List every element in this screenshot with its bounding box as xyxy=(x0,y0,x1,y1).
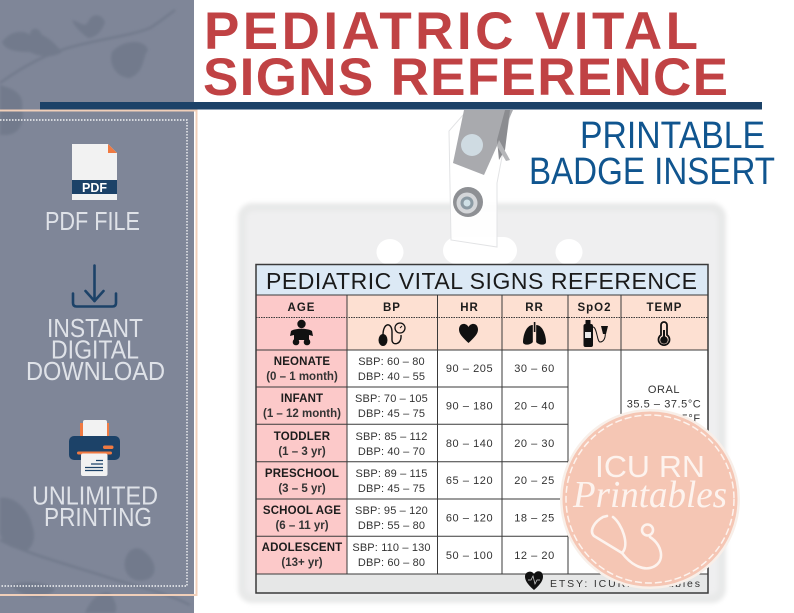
age column labels: SCHOOL AGE xyxy=(263,505,341,517)
age column labels: NEONATE xyxy=(274,356,330,368)
age column labels: (1 – 3 yr) xyxy=(278,446,326,458)
icon: oxygen tank xyxy=(584,320,608,347)
respiratory rate values xyxy=(514,363,555,562)
footer credit xyxy=(525,571,700,590)
blood pressure values xyxy=(352,356,431,569)
footer credit: ETSY: ICURNPrintables xyxy=(550,578,700,590)
subtitle: PRINTABLE xyxy=(580,115,765,157)
label: PDF file: PDF FILE xyxy=(45,206,140,236)
label: instant digital download: DOWNLOAD xyxy=(26,356,165,386)
blood pressure values: SBP: 60 – 80 xyxy=(358,356,425,368)
label: unlimited printing xyxy=(32,480,158,532)
badge: ICU RN Printables logo xyxy=(560,409,740,589)
label: instant digital download: INSTANT xyxy=(47,313,143,343)
heart rate values xyxy=(446,363,493,562)
age column labels: (13+ yr) xyxy=(281,557,323,569)
label: instant digital download: DIGITAL xyxy=(51,334,139,364)
respiratory rate values: 20 – 30 xyxy=(514,438,555,450)
blood pressure values: DBP: 55 – 80 xyxy=(358,520,425,532)
column headers xyxy=(288,302,682,314)
temperature values: 95.9 – 99.5°F xyxy=(627,413,701,425)
icon: blood pressure cuff xyxy=(378,323,405,346)
badge insert reference table xyxy=(256,264,708,593)
heart rate values: 60 – 120 xyxy=(446,512,493,524)
temperature values xyxy=(627,384,701,425)
age column labels: (1 – 12 month) xyxy=(263,408,341,420)
age column labels: ADOLESCENT xyxy=(262,542,342,554)
peach border lines xyxy=(0,110,196,595)
table title: PEDIATRIC VITAL SIGNS REFERENCE xyxy=(266,268,697,294)
blood pressure values: SBP: 85 – 112 xyxy=(355,431,428,443)
decorative leaf shadows xyxy=(0,10,190,613)
label: instant digital download xyxy=(26,313,165,386)
icon: download xyxy=(73,266,116,306)
column headers: HR xyxy=(460,302,479,314)
respiratory rate values: 20 – 25 xyxy=(514,475,555,487)
heading: main title: PEDIATRIC VITAL xyxy=(204,2,698,61)
age column labels: (0 – 1 month) xyxy=(266,371,338,383)
heading: main title xyxy=(203,2,728,107)
label: unlimited printing: UNLIMITED xyxy=(32,480,158,510)
blood pressure values: DBP: 60 – 80 xyxy=(358,557,425,569)
heart rate values: 90 – 205 xyxy=(446,363,493,375)
blood pressure values: SBP: 95 – 120 xyxy=(355,505,428,517)
column headers: SpO2 xyxy=(577,302,612,314)
metal clip xyxy=(453,110,513,217)
age column labels: TODDLER xyxy=(274,431,331,443)
temperature values: 35.5 – 37.5°C xyxy=(627,398,701,410)
blood pressure values: DBP: 45 – 75 xyxy=(358,483,425,495)
column headers: BP xyxy=(383,302,401,314)
icon: baby xyxy=(290,320,313,345)
respiratory rate values: 18 – 25 xyxy=(514,512,555,524)
icon: PDF file: PDF xyxy=(82,181,107,195)
column headers: AGE xyxy=(288,302,315,314)
blood pressure values: SBP: 70 – 105 xyxy=(355,393,428,405)
respiratory rate values: 20 – 40 xyxy=(514,400,555,412)
badge holder and clip xyxy=(238,110,726,603)
icon: PDF file xyxy=(72,144,117,200)
icon: heart xyxy=(459,324,478,343)
age column labels: PRESCHOOL xyxy=(265,468,339,480)
age column labels: (6 – 11 yr) xyxy=(275,520,329,532)
table backgrounds xyxy=(256,265,708,593)
blood pressure values: SBP: 89 – 115 xyxy=(355,468,428,480)
icon: stethoscope xyxy=(592,516,661,568)
dotted border xyxy=(0,120,187,586)
icon: thermometer xyxy=(658,322,670,345)
heading: main title: SIGNS REFERENCE xyxy=(203,48,728,107)
age column labels xyxy=(262,356,342,569)
blood pressure values: SBP: 110 – 130 xyxy=(352,542,431,554)
badge: ICU RN Printables logo: Printables xyxy=(572,474,727,516)
heart rate values: 80 – 140 xyxy=(446,438,493,450)
column headers: RR xyxy=(525,302,544,314)
icon: lungs xyxy=(523,322,546,345)
clear strap xyxy=(449,115,510,247)
age column labels: INFANT xyxy=(281,393,323,405)
subtitle xyxy=(529,115,775,193)
blood pressure values: DBP: 40 – 55 xyxy=(358,371,425,383)
heart rate values: 50 – 100 xyxy=(446,550,493,562)
respiratory rate values: 30 – 60 xyxy=(514,363,555,375)
blood pressure values: DBP: 40 – 70 xyxy=(358,446,425,458)
blood pressure values: DBP: 45 – 75 xyxy=(358,408,425,420)
icon: printer xyxy=(69,420,120,476)
clear vinyl holder xyxy=(238,203,726,603)
punch holes xyxy=(376,237,582,265)
heart rate values: 90 – 180 xyxy=(446,400,493,412)
temperature values: ORAL xyxy=(648,384,680,396)
column headers: TEMP xyxy=(647,302,682,314)
label: unlimited printing: PRINTING xyxy=(44,502,152,532)
age column labels: (3 – 5 yr) xyxy=(278,483,326,495)
panel: sidebar xyxy=(0,0,196,613)
badge: ICU RN Printables logo: ICU RN xyxy=(595,449,705,484)
title underline bar xyxy=(40,102,762,110)
heart rate values: 65 – 120 xyxy=(446,475,493,487)
respiratory rate values: 12 – 20 xyxy=(514,550,555,562)
table grid xyxy=(256,264,708,593)
